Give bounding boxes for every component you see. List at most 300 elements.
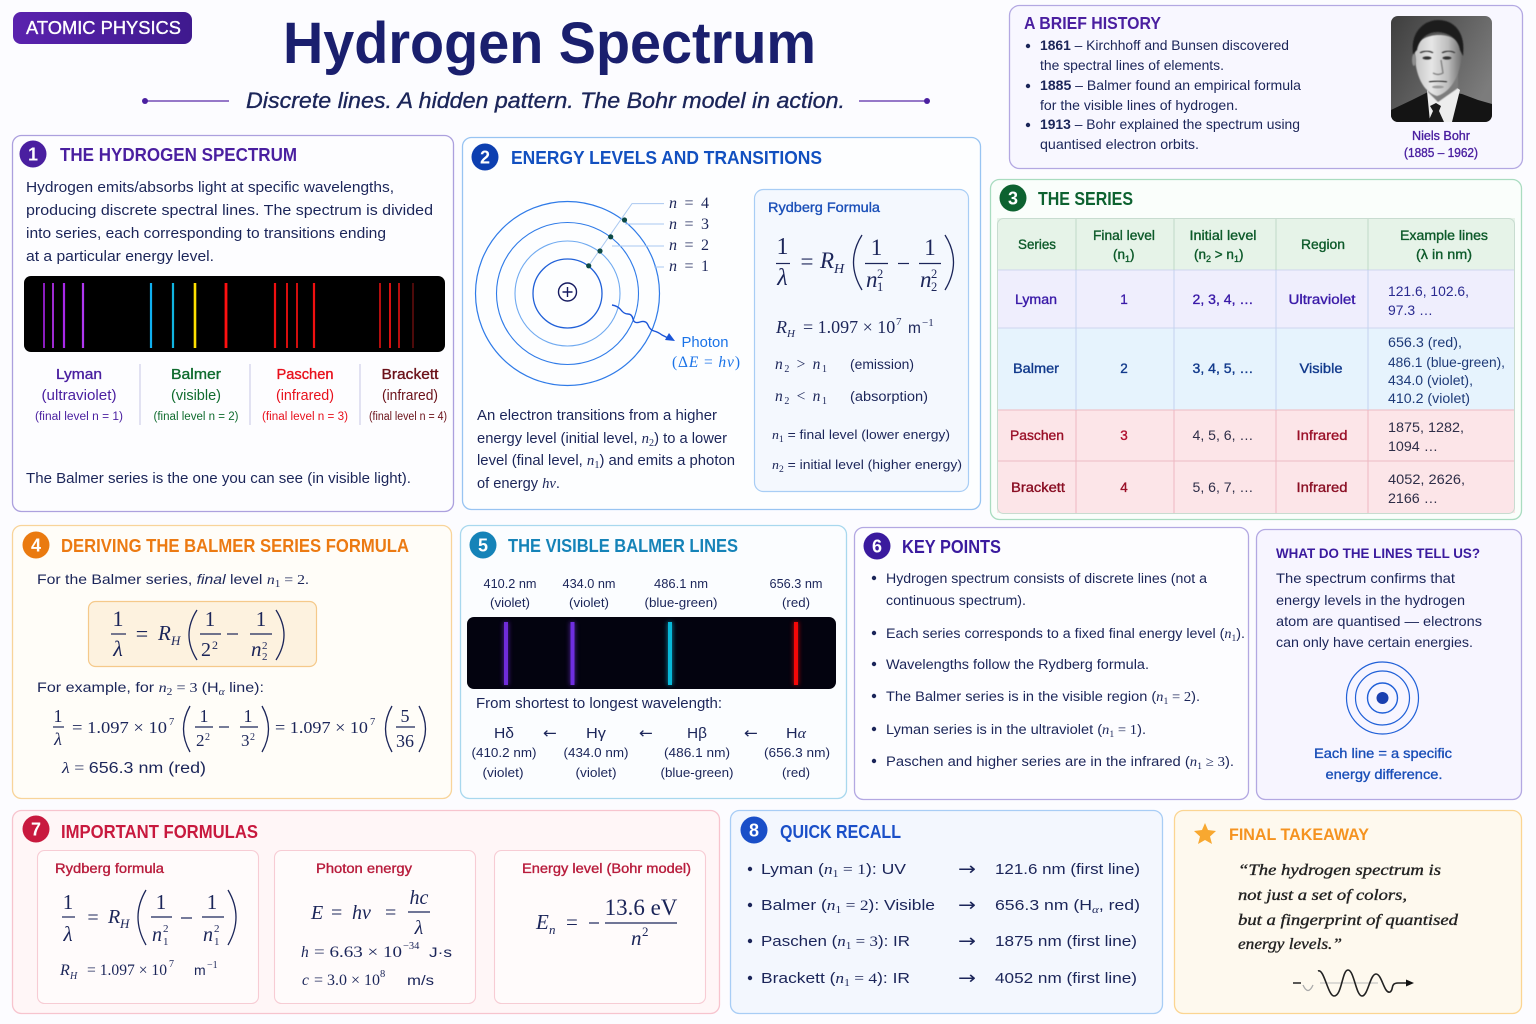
- Rydberg equation: 1: [924, 235, 936, 260]
- card: Rydberg formula: 1: [156, 890, 166, 914]
- number badge 2: 2: [480, 148, 490, 168]
- table header: [1018, 228, 1488, 264]
- row: Brackett: 2166 …: [1388, 491, 1438, 506]
- row: Lyman: 2, 3, 4, …: [1192, 292, 1254, 307]
- Balmer formula box: 2: [212, 638, 218, 652]
- Bohr atom diagram: [476, 195, 709, 386]
- row: Balmer: 410.2 (violet): [1388, 391, 1470, 406]
- card: photon energy: m/s: [407, 972, 434, 988]
- worked calculation: 1: [200, 706, 208, 726]
- H lines sequence: Hδ: [494, 725, 514, 742]
- table header: Region: [1301, 237, 1345, 252]
- key points list: Paschen and higher series are in the infrared ( n: [886, 754, 1197, 769]
- card: photon energy: −34: [403, 941, 420, 952]
- card: photon energy: hν: [352, 902, 371, 924]
- card: photon energy: =: [331, 902, 342, 924]
- worked calculation: 36: [396, 731, 414, 751]
- series labels: (final level n = 3): [262, 411, 348, 423]
- card: Bohr energy level: n: [631, 926, 642, 950]
- card: Bohr energy level: Energy level (Bohr model): [522, 861, 691, 876]
- Balmer spectrum strip: [467, 617, 836, 689]
- row: Lyman: Lyman: [1015, 292, 1057, 307]
- icon: wave arrow: [1293, 970, 1414, 996]
- row: Balmer: 434.0 (violet),: [1388, 373, 1473, 388]
- key points list: The Balmer series is in the visible region ( n: [886, 689, 1163, 704]
- Rydberg equation: [776, 234, 954, 294]
- H lines sequence: (434.0 nm): [564, 745, 628, 760]
- key points list: ).: [1137, 722, 1146, 737]
- row: Brackett: [1011, 472, 1465, 506]
- card: [1174, 810, 1522, 1014]
- transition explanation: level (final level, n: [477, 453, 594, 469]
- card: photon energy: 8: [380, 969, 385, 980]
- number badge 4: [22, 532, 50, 558]
- worked calculation: 1: [54, 706, 62, 726]
- Rydberg equation: n: [920, 267, 932, 292]
- quote: [1238, 862, 1459, 953]
- Rydberg formula box: [754, 190, 968, 492]
- closing note: The Balmer series is the one you can see (in visible light).: [26, 471, 411, 487]
- Balmer formula box: [88, 602, 316, 666]
- card: [854, 528, 1248, 800]
- heading: ENERGY LEVELS AND TRANSITIONS: [511, 148, 822, 168]
- emission and absorption conditions: n: [775, 356, 783, 373]
- key points list: ≥ 3: [1202, 754, 1225, 769]
- panel 6: key points: [854, 528, 1248, 800]
- Rydberg equation: R: [819, 248, 834, 273]
- recall list: 1: [844, 978, 850, 989]
- key points list: Hydrogen spectrum consists of discrete lines (not a: [886, 571, 1208, 586]
- history card: [1010, 6, 1522, 168]
- H lines sequence: (blue-green): [660, 765, 734, 780]
- row: Lyman: 97.3 …: [1388, 303, 1433, 318]
- quote: not just a set of colors,: [1238, 887, 1407, 904]
- heading: THE SERIES: [1038, 189, 1133, 209]
- caption: Each line = a specific: [1314, 745, 1452, 761]
- photon label: Photon: [682, 335, 728, 351]
- recall list: 656.3 nm (H: [995, 897, 1078, 914]
- card: Rydberg formula: n: [203, 924, 213, 946]
- portrait: Niels Bohr: [1391, 16, 1492, 122]
- wavelength labels: 656.3 nm: [770, 576, 822, 591]
- emission and absorption conditions: = final level (lower energy): [784, 427, 950, 442]
- table header: Series: [1018, 237, 1056, 252]
- transition explanation: of energy hν.: [477, 476, 560, 492]
- Rydberg equation: 2: [931, 280, 937, 294]
- table header: ): [1239, 247, 1243, 262]
- card: Rydberg formula: −1: [207, 960, 218, 971]
- card: Rydberg formula: H: [69, 971, 78, 982]
- Balmer formula box: H: [170, 633, 181, 648]
- table header: (λ in nm): [1416, 247, 1472, 262]
- card: photon energy: E: [310, 902, 323, 924]
- Balmer formula box: λ: [112, 636, 123, 661]
- H lines sequence: (violet): [576, 765, 616, 780]
- spectrum strip: [24, 276, 445, 352]
- key points list: ).: [1191, 689, 1200, 704]
- series table: [997, 218, 1515, 514]
- H lines sequence: Hα: [786, 725, 807, 742]
- key points list: Lyman series is in the ultraviolet ( n: [886, 722, 1109, 737]
- H lines sequence: ←: [543, 724, 557, 742]
- card: Rydberg formula: H: [119, 916, 130, 931]
- intro line: For the Balmer series, final level n: [37, 571, 274, 588]
- recall list: Lyman ( n: [761, 861, 831, 878]
- number badge 7: 7: [31, 820, 41, 840]
- card: Rydberg formula: =: [87, 907, 99, 929]
- example line: α: [219, 687, 226, 698]
- H lines sequence: (410.2 nm): [472, 745, 536, 760]
- row: Paschen: [1010, 420, 1464, 454]
- row: Balmer: Visible: [1300, 361, 1342, 376]
- card: photon energy: =: [385, 902, 396, 924]
- key points list: 1: [1232, 633, 1236, 643]
- number badge 7: [22, 816, 50, 842]
- Balmer formula box: n: [251, 637, 262, 661]
- worked calculation: = 1.097 × 10: [72, 718, 167, 737]
- series labels: (final level n = 2): [154, 411, 239, 423]
- wavelength labels: 410.2 nm: [484, 576, 536, 591]
- worked calculation: 5: [400, 706, 410, 726]
- recall list: = 4: [850, 971, 878, 987]
- emission and absorption conditions: n: [775, 388, 783, 405]
- series labels: Balmer: [171, 366, 221, 383]
- number badge 6: 6: [872, 536, 882, 556]
- worked calculation: 7: [370, 717, 375, 728]
- card: [1256, 530, 1522, 800]
- row: Lyman: 1: [1120, 292, 1128, 307]
- key points list: = 1: [1114, 722, 1137, 737]
- recall list: →: [958, 931, 976, 952]
- example line: line):: [225, 679, 264, 695]
- Rydberg constant: −1: [922, 317, 934, 329]
- table header: > n: [1211, 247, 1234, 262]
- Rydberg equation: 1: [877, 280, 883, 294]
- card: [12, 810, 720, 1014]
- row: Balmer: Balmer: [1013, 361, 1060, 376]
- emission and absorption conditions: 2: [784, 364, 789, 375]
- quote: but a fingerprint of quantised: [1238, 912, 1459, 929]
- icon: star: [1194, 823, 1216, 844]
- emission and absorption conditions: >: [791, 356, 811, 373]
- heading: THE HYDROGEN SPECTRUM: [60, 145, 297, 165]
- emission and absorption conditions: 1: [822, 396, 827, 407]
- emission and absorption conditions: [772, 356, 962, 474]
- recall list: 1: [836, 905, 841, 916]
- table header: Example lines: [1400, 228, 1488, 243]
- table header: 2: [1206, 254, 1211, 264]
- card: Rydberg formula: [38, 850, 258, 1004]
- history timeline: 1861 – Kirchhoff and Bunsen discovered: [1040, 37, 1289, 53]
- quote: energy levels.”: [1238, 936, 1342, 953]
- card: photon energy: [274, 850, 476, 1004]
- Bohr atom diagram: n = 4: [669, 195, 709, 212]
- worked calculation: 2: [196, 731, 204, 750]
- recall list: = 3: [851, 934, 878, 950]
- example line: For example, for n: [37, 679, 166, 696]
- example line: (H: [202, 679, 219, 695]
- emission and absorption conditions: = initial level (higher energy): [784, 457, 962, 472]
- card: Rydberg formula: 7: [169, 959, 174, 970]
- H lines sequence: ←: [639, 724, 653, 742]
- transition explanation: ) to a lower: [654, 431, 727, 447]
- order caption: From shortest to longest wavelength:: [476, 696, 722, 712]
- row: Paschen: 4, 5, 6, …: [1192, 428, 1254, 443]
- Rydberg equation: λ: [776, 265, 788, 291]
- row: Paschen: 1875, 1282,: [1388, 420, 1464, 435]
- icon: atom levels: [1346, 662, 1418, 734]
- transition explanation: 2: [649, 438, 654, 449]
- key points list: continuous spectrum).: [886, 593, 1026, 608]
- recall list: →: [958, 895, 976, 916]
- row: Balmer: 3, 4, 5, …: [1192, 361, 1254, 376]
- card: Rydberg formula: = 1.097 × 10: [87, 962, 167, 979]
- history timeline: 1885 – Balmer found an empirical formula: [1040, 77, 1301, 93]
- explanation: atom are quantised — electrons: [1276, 613, 1482, 629]
- series labels: (infrared): [382, 388, 438, 404]
- key points list: ).: [1236, 626, 1245, 641]
- H lines sequence: Hγ: [586, 725, 607, 742]
- Balmer formula box: 1: [256, 607, 266, 631]
- history timeline: 1913 – Bohr explained the spectrum using: [1040, 116, 1300, 132]
- card: Bohr energy level: [494, 850, 706, 1004]
- card: Rydberg formula: R: [59, 962, 70, 979]
- row: Balmer: [1013, 335, 1505, 406]
- heading: IMPORTANT FORMULAS: [61, 822, 258, 842]
- worked calculation: 1: [244, 706, 252, 726]
- card: Rydberg formula: 1: [214, 936, 220, 948]
- panel 8: quick recall: [730, 810, 1162, 1014]
- recall list: , red): [1099, 897, 1140, 914]
- key points list: 1: [1197, 761, 1202, 771]
- caption: [1314, 745, 1452, 782]
- history heading: A BRIEF HISTORY: [1024, 13, 1161, 33]
- Balmer formula box: 1: [112, 606, 124, 631]
- intro line: 1: [275, 579, 280, 590]
- recall list: 1: [846, 941, 851, 952]
- caption: energy difference.: [1326, 766, 1442, 782]
- emission and absorption conditions: 2: [784, 396, 789, 407]
- emission and absorption conditions: 2: [779, 464, 784, 474]
- key points list: ).: [1225, 754, 1234, 769]
- key points list: Wavelengths follow the Rydberg formula.: [886, 657, 1149, 672]
- explanation: [1276, 570, 1482, 650]
- history timeline: the spectral lines of elements.: [1040, 57, 1224, 73]
- row: Paschen: Paschen: [1010, 428, 1064, 443]
- example line: = 3: [172, 681, 202, 696]
- recall list: ): IR: [877, 970, 910, 987]
- number badge 3: [1000, 184, 1026, 212]
- card: Rydberg formula: n: [152, 924, 162, 946]
- H lines sequence: [472, 724, 830, 780]
- Balmer formula box: R: [157, 621, 171, 645]
- panel: a brief history: [1010, 6, 1522, 168]
- key points list: 1: [1163, 696, 1168, 706]
- photon label: [672, 335, 740, 371]
- panel 1: the hydrogen spectrum: [12, 136, 454, 512]
- wavelength labels: (violet): [569, 595, 609, 610]
- card: [460, 526, 846, 798]
- card: [730, 810, 1162, 1014]
- card: Rydberg formula: 1: [63, 890, 73, 914]
- H lines sequence: Hβ: [687, 725, 707, 742]
- Balmer formula box: 2: [262, 651, 268, 663]
- card: Rydberg formula: 1: [163, 936, 168, 948]
- Rydberg constant: m: [908, 320, 921, 337]
- subtitle: Discrete lines. A hidden pattern. The Bohr model in action.: [246, 88, 845, 113]
- worked calculation: [53, 706, 426, 752]
- card: Bohr energy level: E: [535, 910, 549, 934]
- row: Balmer: 656.3 (red),: [1388, 335, 1462, 350]
- transition explanation: 1: [594, 460, 599, 471]
- panel 4: deriving the Balmer formula: [12, 526, 452, 798]
- number badge 4: 4: [31, 536, 41, 556]
- Rydberg equation: 2: [877, 267, 883, 281]
- H lines sequence: (violet): [482, 765, 524, 780]
- card: Rydberg formula: 2: [163, 923, 168, 935]
- explanation: can only have certain energies.: [1276, 634, 1473, 650]
- heading: KEY POINTS: [902, 537, 1001, 557]
- recall list: 1: [833, 869, 838, 880]
- card: photon energy: J·s: [429, 944, 452, 960]
- badge: atomic physics: [13, 12, 192, 44]
- card: Rydberg formula: Rydberg formula: [55, 861, 165, 876]
- worked calculation: 2: [250, 732, 255, 743]
- card: Bohr energy level: 2: [642, 924, 648, 939]
- series labels: Lyman: [56, 366, 102, 383]
- Rydberg constant: R: [775, 317, 787, 337]
- number badge 5: [470, 532, 496, 558]
- panel: final takeaway: [1174, 810, 1522, 1014]
- card: Bohr energy level: n: [549, 922, 556, 937]
- explanation: energy levels in the hydrogen: [1276, 592, 1465, 608]
- Balmer formula box: 2: [201, 639, 211, 661]
- card: [990, 180, 1522, 520]
- Balmer formula box: 2: [262, 640, 268, 652]
- series labels: (final level n = 4): [369, 411, 447, 423]
- title: Hydrogen Spectrum: [283, 11, 816, 76]
- row: Balmer: 2: [1120, 361, 1128, 376]
- row: Balmer: 486.1 (blue-green),: [1388, 355, 1505, 370]
- portrait caption: Niels Bohr: [1412, 129, 1470, 143]
- recall list: Paschen ( n: [761, 933, 845, 950]
- table header: (n: [1194, 247, 1206, 262]
- panel 2: energy levels and transitions: [462, 138, 980, 510]
- Rydberg equation: 1: [871, 235, 882, 260]
- row: Paschen: 3: [1120, 428, 1128, 443]
- worked calculation: 3: [241, 731, 250, 750]
- row: Brackett: Infrared: [1296, 480, 1348, 495]
- number badge 1: [20, 140, 46, 168]
- Rydberg constant: 7: [896, 316, 902, 328]
- panel: what do the lines tell us: [1256, 530, 1522, 800]
- wavelength labels: (blue-green): [644, 595, 718, 610]
- recall list: = 1: [838, 862, 866, 878]
- heading: THE VISIBLE BALMER LINES: [508, 536, 738, 556]
- arrow: emitted photon: [612, 305, 675, 341]
- recall list: α: [1092, 904, 1099, 916]
- heading: WHAT DO THE LINES TELL US?: [1276, 546, 1480, 561]
- history timeline: [1026, 37, 1301, 152]
- example line: 2: [167, 687, 172, 698]
- worked calculation: = 1.097 × 10: [275, 718, 368, 737]
- recall list: 1875 nm (first line): [995, 933, 1137, 950]
- H lines sequence: ←: [744, 724, 758, 742]
- transition explanation: ) and emits a photon: [599, 453, 735, 469]
- row: Brackett: 5, 6, 7, …: [1192, 480, 1254, 495]
- row: Brackett: 4052, 2626,: [1388, 472, 1465, 487]
- history timeline: quantised electron orbits.: [1040, 136, 1199, 152]
- wavelength labels: 434.0 nm: [562, 576, 616, 591]
- key points list: = 2: [1168, 689, 1191, 704]
- recall list: [748, 859, 1140, 989]
- key points list: [872, 571, 1245, 771]
- panel 3: the series: [990, 180, 1522, 520]
- card: [12, 526, 452, 798]
- explanation: The spectrum confirms that: [1276, 570, 1455, 586]
- recall list: Balmer ( n: [761, 897, 834, 914]
- portrait caption: (1885 – 1962): [1404, 146, 1478, 160]
- badge: atomic physics: ATOMIC PHYSICS: [26, 17, 181, 38]
- H lines sequence: (red): [782, 765, 810, 780]
- series labels: (ultraviolet): [42, 388, 117, 404]
- row: Paschen: Infrared: [1296, 428, 1348, 443]
- card: Rydberg formula: m: [194, 962, 206, 978]
- wavelength labels: [484, 576, 822, 610]
- number badge 3: 3: [1008, 188, 1018, 208]
- recall list: ): IR: [878, 933, 910, 950]
- series labels: [35, 364, 447, 425]
- Rydberg equation: 1: [776, 234, 788, 260]
- heading: DERIVING THE BALMER SERIES FORMULA: [61, 536, 409, 556]
- photon label: (ΔE = hν): [672, 354, 740, 371]
- Rydberg equation: n: [866, 267, 878, 292]
- H lines sequence: (656.3 nm): [764, 745, 830, 760]
- Balmer formula box: 1: [205, 607, 215, 631]
- intro text: into series, each corresponding to transitions ending: [26, 226, 386, 242]
- panel 5: the visible Balmer lines: [460, 526, 846, 798]
- recall list: 121.6 nm (first line): [995, 861, 1140, 878]
- Rydberg equation: =: [801, 249, 813, 274]
- card: photon energy: Photon energy: [316, 861, 412, 876]
- row: Lyman: Ultraviolet: [1288, 292, 1356, 307]
- row: Lyman: [1015, 284, 1469, 318]
- emission and absorption conditions: n: [813, 388, 820, 405]
- recall list: 4052 nm (first line): [995, 970, 1137, 987]
- intro line: = 2.: [280, 573, 309, 588]
- table header: Initial level: [1190, 228, 1257, 243]
- worked calculation: 2: [205, 732, 210, 743]
- heading: QUICK RECALL: [780, 822, 901, 842]
- transition explanation: [477, 408, 735, 492]
- wavelength labels: 486.1 nm: [654, 576, 708, 591]
- card: Rydberg formula: R: [107, 906, 120, 928]
- number badge 8: 8: [749, 820, 759, 840]
- row: Paschen: 1094 …: [1388, 439, 1438, 454]
- intro text: at a particular energy level.: [26, 249, 214, 265]
- card: Bohr energy level: =: [566, 910, 578, 934]
- Rydberg equation: 2: [931, 267, 937, 281]
- number badge 5: 5: [478, 536, 488, 556]
- recall list: = 2: [841, 898, 869, 914]
- card: Rydberg formula: 1: [207, 890, 217, 914]
- transition explanation: An electron transitions from a higher: [477, 408, 717, 424]
- Rydberg constant: [775, 316, 934, 340]
- series labels: (infrared): [276, 388, 334, 404]
- card: Rydberg formula: λ: [62, 922, 73, 946]
- intro text: Hydrogen emits/absorbs light at specific wavelengths,: [26, 180, 394, 196]
- recall list: ): Visible: [869, 897, 935, 914]
